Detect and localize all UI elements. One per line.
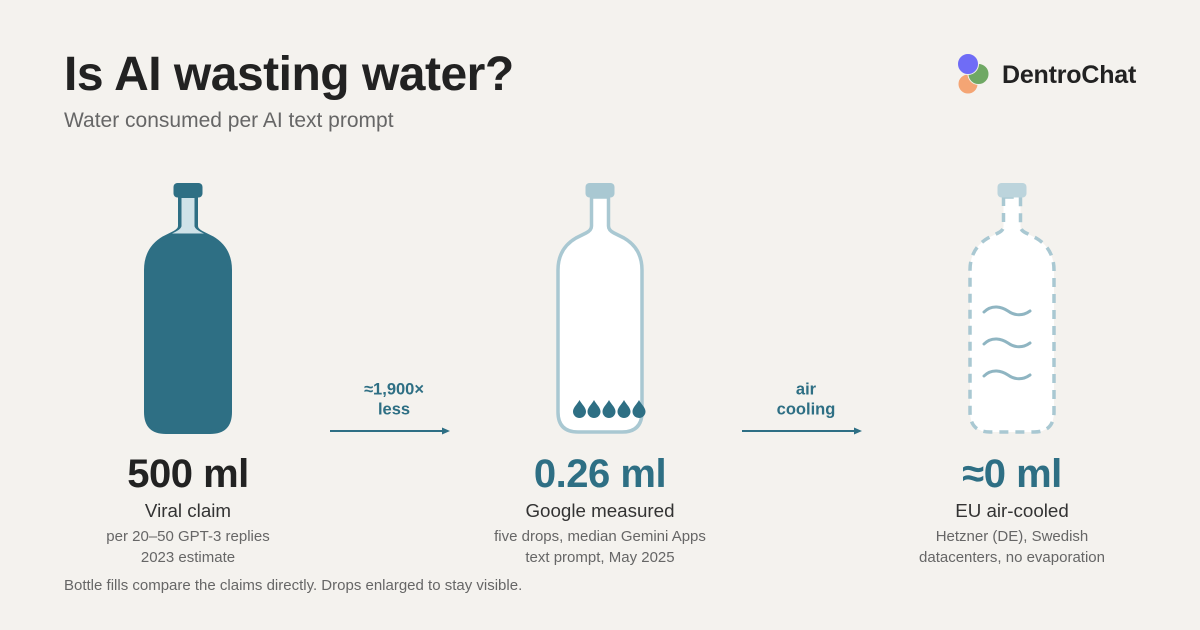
footnote: Bottle fills compare the claims directly. Drops enlarged to stay visible. xyxy=(64,577,522,594)
arrow: air cooling xyxy=(742,380,862,434)
note: EU air-cooled: datacenters, no evaporation xyxy=(919,549,1105,566)
logo: DentroChat xyxy=(958,54,1137,94)
icon: water drops xyxy=(573,400,646,418)
title: Is AI wasting water? xyxy=(64,48,514,101)
panel: viral claim xyxy=(106,183,270,566)
logo wordmark: DentroChat xyxy=(1002,61,1137,89)
note: EU air-cooled: Hetzner (DE), Swedish xyxy=(936,528,1088,545)
icon: bottle with five drops xyxy=(558,183,646,432)
panel: EU air-cooled xyxy=(919,183,1105,566)
value: 500 ml: 500 ml xyxy=(127,452,249,496)
arrow: 1,900 times less: ≈1,900× xyxy=(364,380,424,398)
icon: logo circles xyxy=(958,54,989,94)
panel: google measured xyxy=(494,183,706,566)
arrow: air cooling: cooling xyxy=(777,400,835,418)
label: viral claim: Viral claim xyxy=(145,500,231,521)
icon: dashed empty bottle xyxy=(970,183,1054,432)
note: google measured: five drops, median Gemini Apps xyxy=(494,528,706,545)
label: EU air-cooled: EU air-cooled xyxy=(955,500,1069,521)
value: approx zero ml: ≈0 ml xyxy=(962,452,1062,496)
label: google measured: Google measured xyxy=(525,500,675,521)
arrow: 1,900 times less xyxy=(330,380,450,434)
icon: air waves xyxy=(984,307,1030,379)
note: viral claim: per 20–50 GPT-3 replies xyxy=(106,528,270,545)
note: google measured: text prompt, May 2025 xyxy=(525,549,675,566)
arrow: 1,900 times less: less xyxy=(378,400,410,418)
value: 0.26 ml: 0.26 ml xyxy=(534,452,666,496)
icon: full bottle xyxy=(146,183,230,432)
subtitle: Water consumed per AI text prompt xyxy=(64,109,394,132)
note: viral claim: 2023 estimate xyxy=(141,549,235,566)
arrow: air cooling: air xyxy=(796,380,817,398)
